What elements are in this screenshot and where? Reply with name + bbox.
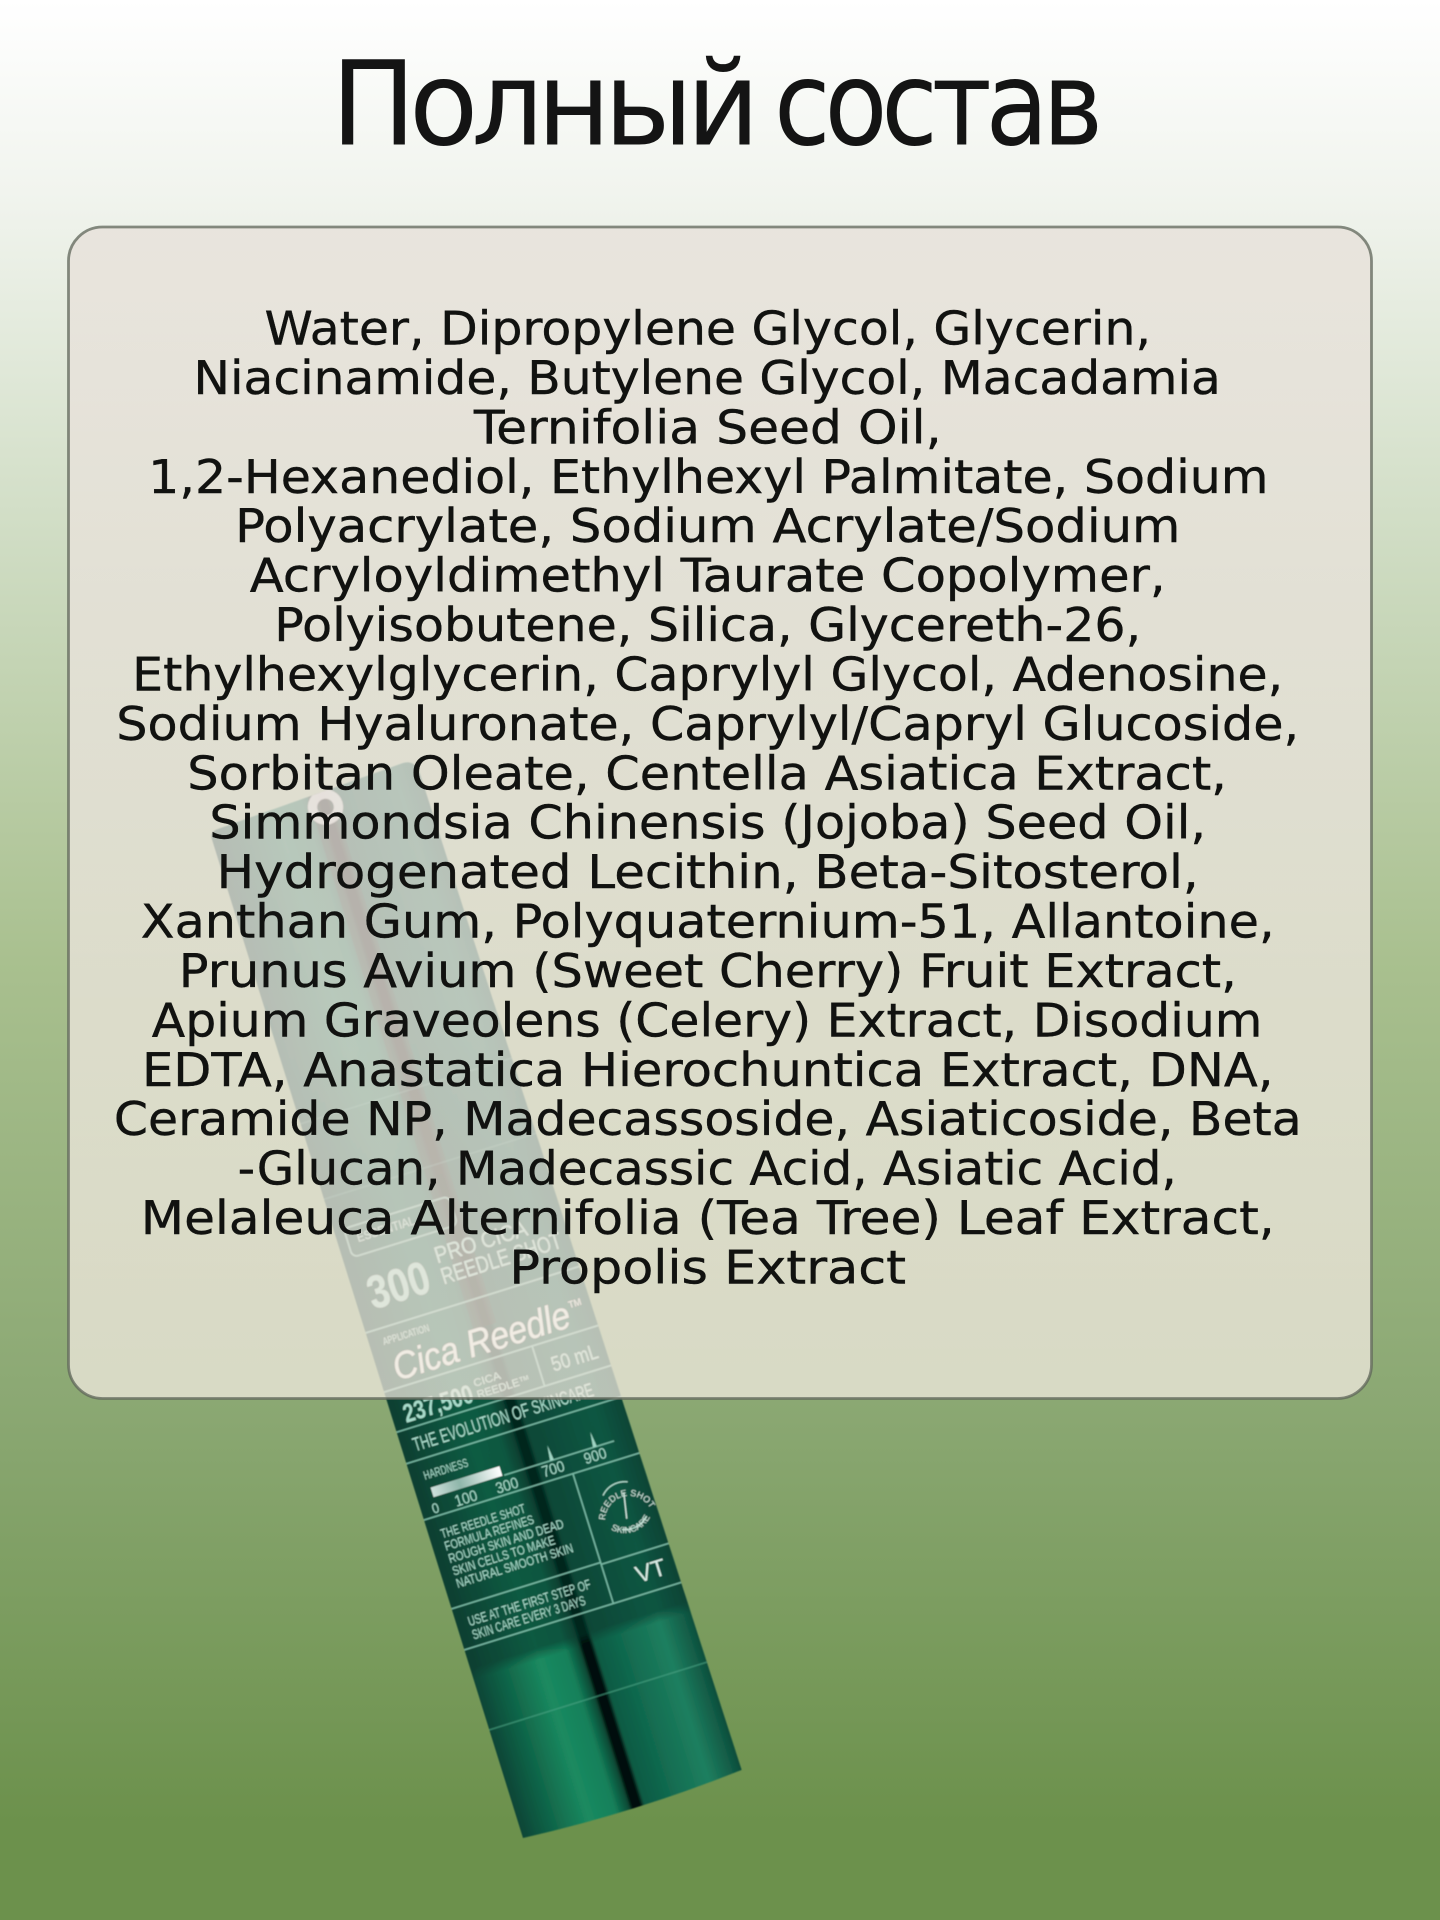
ingredients text: 1,2-Hexanediol, Ethylhexyl Palmitate, Sodium bbox=[148, 450, 1269, 504]
product bottle image bbox=[211, 762, 742, 1838]
product bottle image: ESSENTIAL bbox=[355, 1214, 417, 1245]
ingredients text: Ternifolia Seed Oil, bbox=[473, 400, 942, 454]
product bottle image: ROUGH SKIN AND DEAD bbox=[446, 1516, 565, 1566]
product bottle image: HARDNESS bbox=[422, 1456, 470, 1483]
product bottle image: 700 bbox=[540, 1458, 567, 1481]
product bottle image: 300 bbox=[361, 1251, 436, 1319]
ingredients text: Prunus Avium (Sweet Cherry) Fruit Extract, bbox=[179, 944, 1237, 998]
product bottle image: THE EVOLUTION OF SKINCARE bbox=[410, 1380, 596, 1456]
ingredients text: Melaleuca Alternifolia (Tea Tree) Leaf Extract, bbox=[141, 1191, 1275, 1245]
product bottle image: REEDLE™ bbox=[476, 1373, 532, 1401]
ingredients text: Xanthan Gum, Polyquaternium-51, Allantoine, bbox=[141, 894, 1275, 948]
product bottle image: VT bbox=[632, 1554, 670, 1589]
product bottle image: PRO CICA bbox=[431, 1215, 531, 1268]
ingredients text: Water, Dipropylene Glycol, Glycerin, bbox=[264, 302, 1151, 356]
product bottle image: 237,500 bbox=[399, 1379, 477, 1429]
title: состав bbox=[774, 36, 1098, 172]
panel: ingredients card bbox=[68, 227, 1372, 1398]
product bottle image: 300 bbox=[494, 1475, 521, 1498]
title: Полный bbox=[331, 36, 753, 172]
product bottle image: FORMULA REFINES bbox=[443, 1512, 536, 1554]
product bottle image: TM bbox=[567, 1297, 583, 1310]
ingredients text: Acryloyldimethyl Taurate Copolymer, bbox=[250, 549, 1166, 603]
ingredients text: Polyisobutene, Silica, Glycereth-26, bbox=[274, 598, 1141, 652]
ingredients text: Apium Graveolens (Celery) Extract, Disodium bbox=[152, 993, 1262, 1047]
product bottle image: NATURAL SMOOTH SKIN bbox=[454, 1540, 575, 1591]
title bbox=[331, 36, 1098, 172]
product bottle image: Cica Reedle bbox=[388, 1294, 576, 1389]
product bottle image: SKIN CARE EVERY 3 DAYS bbox=[470, 1592, 587, 1643]
ingredients text: -Glucan, Madecassic Acid, Asiatic Acid, bbox=[238, 1142, 1177, 1196]
ingredients text: Simmondsia Chinensis (Jojoba) Seed Oil, bbox=[209, 796, 1206, 850]
ingredients text: Propolis Extract bbox=[509, 1240, 906, 1294]
product bottle image: 50 mL bbox=[548, 1340, 601, 1377]
product bottle image: 0 bbox=[430, 1499, 441, 1518]
ingredients text: Ceramide NP, Madecassoside, Asiaticoside, Beta bbox=[114, 1092, 1302, 1146]
ingredients text: Ethylhexylglycerin, Caprylyl Glycol, Adenosine, bbox=[132, 647, 1283, 701]
product bottle image: REEDLE SHOT bbox=[598, 1488, 656, 1521]
ingredients text: Niacinamide, Butylene Glycol, Macadamia bbox=[194, 351, 1221, 405]
ingredients text: Sorbitan Oleate, Centella Asiatica Extract, bbox=[187, 746, 1227, 800]
product bottle image: THE REEDLE SHOT bbox=[439, 1501, 527, 1541]
ingredients text bbox=[114, 302, 1302, 1294]
product bottle image: 900 bbox=[582, 1445, 609, 1468]
product bottle image: USE AT THE FIRST STEP OF bbox=[466, 1576, 593, 1629]
ingredients text: Sodium Hyaluronate, Caprylyl/Capryl Glucoside, bbox=[116, 697, 1299, 751]
product bottle image: SKIN CELLS TO MAKE bbox=[450, 1532, 557, 1579]
ingredients text: Polyacrylate, Sodium Acrylate/Sodium bbox=[235, 499, 1180, 553]
product bottle image: 100 bbox=[453, 1488, 480, 1511]
ingredients text: Hydrogenated Lecithin, Beta-Sitosterol, bbox=[217, 845, 1199, 899]
product bottle image: APPLICATION bbox=[382, 1323, 431, 1348]
ingredients text: EDTA, Anastatica Hierochuntica Extract, DNA, bbox=[142, 1043, 1274, 1097]
product bottle image: REEDLE SHOT bbox=[438, 1227, 565, 1289]
product bottle image: SKINCARE bbox=[610, 1514, 651, 1534]
product bottle image: CICA bbox=[472, 1370, 503, 1390]
